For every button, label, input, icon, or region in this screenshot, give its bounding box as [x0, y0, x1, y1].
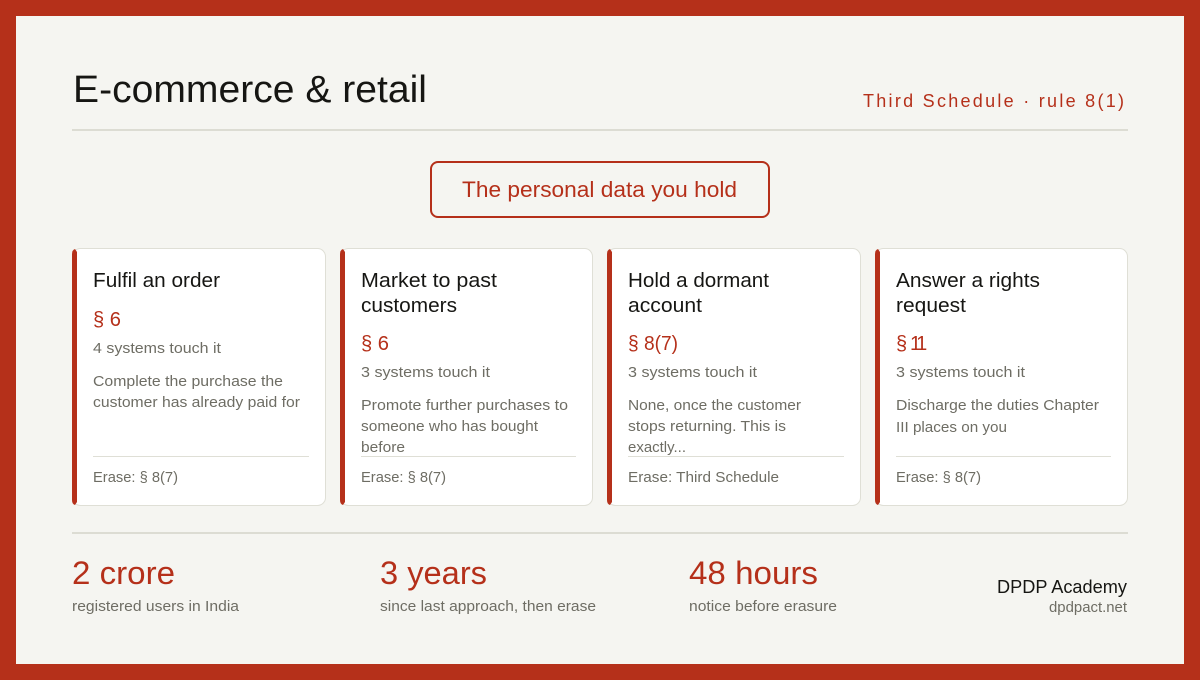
title: E-commerce & retail — [73, 69, 427, 111]
panel: hold a dormant account: None, once the customer — [628, 397, 801, 414]
stat: 3 years: 3 years — [380, 555, 487, 591]
stat: 48 hours: notice before erasure — [689, 598, 837, 615]
stat: 2 crore — [72, 555, 240, 615]
panel: hold a dormant account: Erase: Third Schedule — [628, 469, 779, 486]
panel: fulfil an order: customer has already paid for — [93, 394, 300, 411]
panel: hold a dormant account: § 8(7) — [628, 333, 678, 355]
central data box: The personal data you hold — [462, 177, 737, 202]
panel: hold a dormant account: account — [628, 295, 702, 317]
panel: fulfil an order: § 6 — [93, 309, 121, 331]
panel: hold a dormant account: stops returning. This is — [628, 418, 786, 435]
schedule reference: Third Schedule · rule 8(1) — [863, 91, 1124, 111]
panel: answer a rights request: Erase: § 8(7) — [896, 469, 981, 486]
panel: answer a rights request: 11 — [910, 333, 927, 355]
panel: market to past customers: customers — [361, 295, 457, 317]
panel: market to past customers: someone who has bought — [361, 418, 539, 435]
stat: 3 years — [380, 555, 596, 615]
panel: fulfil an order: 4 systems touch it — [93, 340, 222, 357]
brand: dpdpact.net — [1049, 599, 1128, 616]
panel: answer a rights request: 3 systems touch it — [896, 364, 1026, 381]
central data box — [431, 162, 769, 217]
panel: fulfil an order: Erase: § 8(7) — [93, 469, 178, 486]
panel: market to past customers: Market to past — [361, 270, 497, 292]
panel: fulfil an order: Fulfil an order — [93, 270, 220, 292]
panel: answer a rights request: § — [896, 333, 907, 355]
stat: 3 years: since last approach, then erase — [380, 598, 596, 615]
panel: hold a dormant account: Hold a dormant — [628, 270, 769, 292]
brand: DPDP Academy — [997, 577, 1127, 597]
stat: 2 crore: 2 crore — [72, 555, 175, 591]
stat: 48 hours: 48 hours — [689, 555, 818, 591]
panel: answer a rights request: request — [896, 295, 966, 317]
panel: hold a dormant account: 3 systems touch it — [628, 364, 758, 381]
panel: market to past customers: before — [361, 439, 405, 456]
stat: 2 crore: registered users in India — [72, 598, 240, 615]
panel: market to past customers: Promote further purchases to — [361, 397, 568, 414]
panel: hold a dormant account — [607, 248, 860, 506]
panel: fulfil an order: Complete the purchase the — [93, 373, 283, 390]
stat: 48 hours — [689, 555, 837, 615]
panel: market to past customers: Erase: § 8(7) — [361, 469, 446, 486]
panel: hold a dormant account: exactly... — [628, 439, 686, 456]
panel: fulfil an order — [72, 248, 326, 506]
panel: answer a rights request — [875, 248, 1128, 506]
panel: market to past customers — [340, 248, 592, 506]
panel: answer a rights request: III places on you — [896, 419, 1007, 436]
panel: market to past customers: 3 systems touch it — [361, 364, 491, 381]
brand — [997, 577, 1128, 616]
panel: market to past customers: § 6 — [361, 333, 389, 355]
panel: answer a rights request: Answer a rights — [896, 270, 1040, 292]
panel: answer a rights request: Discharge the duties Chapter — [896, 397, 1099, 414]
